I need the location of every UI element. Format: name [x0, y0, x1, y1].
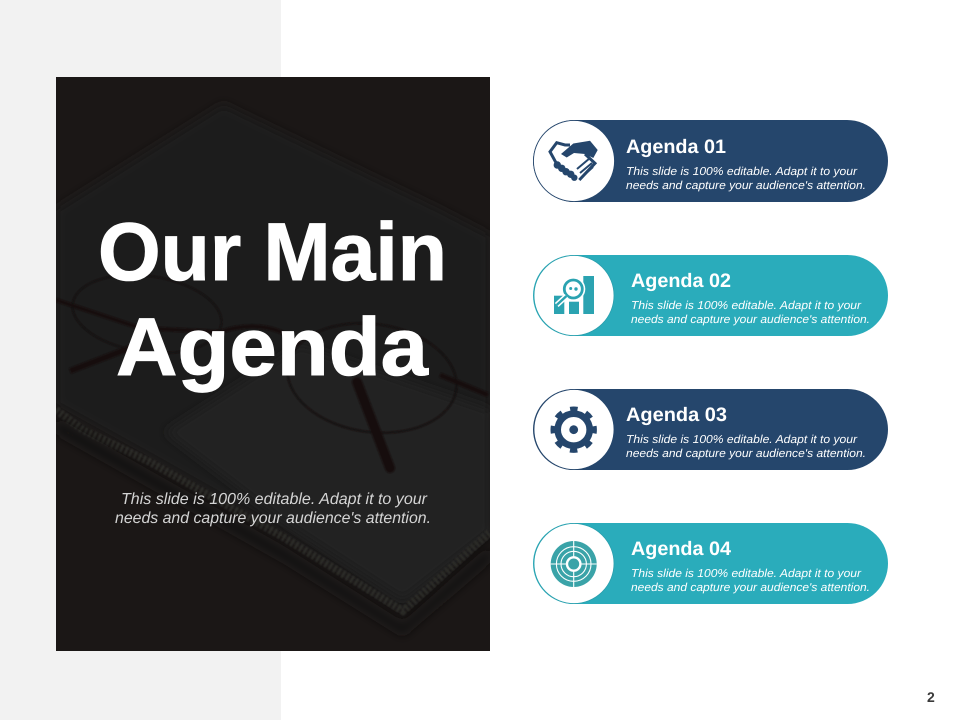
agenda 01 heading: Agenda 01	[626, 136, 726, 158]
left background strip	[0, 0, 281, 720]
agenda 04 heading: Agenda 04	[631, 538, 731, 560]
agenda 03 description	[626, 434, 866, 460]
agenda 03 description: This slide is 100% editable. Adapt it to your	[626, 434, 858, 446]
panel description: This slide is 100% editable. Adapt it to your	[121, 491, 428, 508]
icon: chart with magnifier	[554, 276, 594, 314]
agenda 02 description	[631, 300, 870, 326]
agenda 01 description: This slide is 100% editable. Adapt it to your	[626, 166, 858, 178]
title	[98, 207, 447, 393]
agenda 02 description: This slide is 100% editable. Adapt it to your	[631, 300, 862, 312]
agenda 02 heading: Agenda 02	[631, 270, 731, 292]
agenda 04 description: This slide is 100% editable. Adapt it to your	[631, 568, 862, 580]
icon: target	[551, 541, 597, 587]
agenda 01 description: needs and capture your audience's attention.	[626, 180, 866, 192]
icon: handshake	[550, 141, 598, 181]
agenda 04 description	[631, 568, 870, 594]
page number: 2	[927, 689, 935, 705]
icon: gear	[553, 409, 595, 451]
agenda 03 heading: Agenda 03	[626, 404, 727, 426]
agenda 02 description: needs and capture your audience's attention.	[631, 314, 870, 326]
agenda item 02	[533, 255, 888, 336]
panel description: needs and capture your audience's attention.	[115, 510, 431, 527]
panel: dark photo with title	[56, 77, 490, 651]
agenda item 01	[533, 120, 888, 202]
agenda item 03	[533, 389, 888, 470]
agenda 01 description	[626, 166, 866, 192]
agenda 03 description: needs and capture your audience's attention.	[626, 448, 866, 460]
panel description	[115, 491, 431, 527]
title: Our Main	[98, 207, 447, 298]
photo: notebook and glasses	[56, 211, 490, 616]
agenda item 04	[533, 523, 888, 604]
title: Agenda	[116, 302, 429, 393]
agenda 04 description: needs and capture your audience's attention.	[631, 582, 870, 594]
